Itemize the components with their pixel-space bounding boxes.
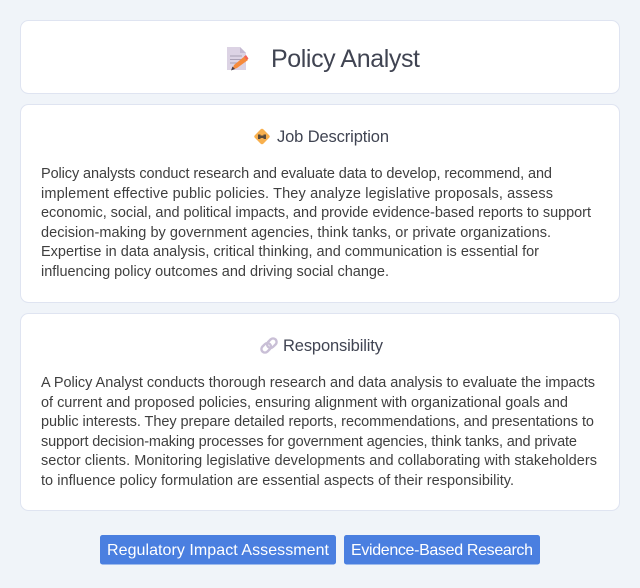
text block: job description: economic, social, and political impacts, and provide evidence-based reports to support	[41, 205, 591, 221]
text block: job description: Policy analysts conduct research and evaluate data to develop, recommend, and	[41, 166, 552, 182]
icon: document with pencil	[227, 47, 248, 70]
panel: job description	[20, 104, 620, 302]
text block: responsibility: to influence policy formulation are essential aspects of their responsibility.	[41, 473, 514, 489]
icon: orange diamond	[254, 128, 270, 145]
text block: job description: Expertise in data analysis, critical thinking, and communication is essential for	[41, 244, 539, 260]
icon: link	[260, 337, 278, 354]
text block: job description: implement effective public policies. They analyze legislative proposals, assess	[41, 186, 553, 202]
text block: responsibility: of current and proposed policies, ensuring alignment with organizational goals and	[41, 395, 568, 411]
text block: job description: influencing policy outcomes and driving social change.	[41, 264, 389, 280]
text block: responsibility: sector clients. Monitoring legislative developments and collaborating with stakeholders	[41, 453, 597, 469]
heading: job description: Job Description	[277, 128, 389, 146]
panel: title card	[20, 20, 620, 94]
text block: responsibility	[41, 375, 597, 489]
tag: regulatory impact assessment	[100, 535, 336, 564]
text block: responsibility: public interests. They prepare detailed reports, recommendations, and presentations to	[41, 414, 594, 430]
text block: responsibility: support decision-making processes for government agencies, think tanks, and private	[41, 434, 577, 450]
text block: responsibility: A Policy Analyst conducts thorough research and data analysis to evaluate the impacts	[41, 375, 595, 391]
text block: job description	[41, 166, 591, 280]
panel: responsibility	[20, 314, 620, 510]
tag: evidence-based research: Evidence-Based Research	[351, 542, 533, 559]
heading: responsibility: Responsibility	[283, 337, 384, 355]
text block: job description: decision-making by government agencies, think tanks, or private organizations.	[41, 225, 551, 241]
tag: evidence-based research	[344, 535, 540, 564]
title: Policy Analyst	[271, 45, 420, 73]
tag: regulatory impact assessment: Regulatory Impact Assessment	[107, 542, 330, 559]
